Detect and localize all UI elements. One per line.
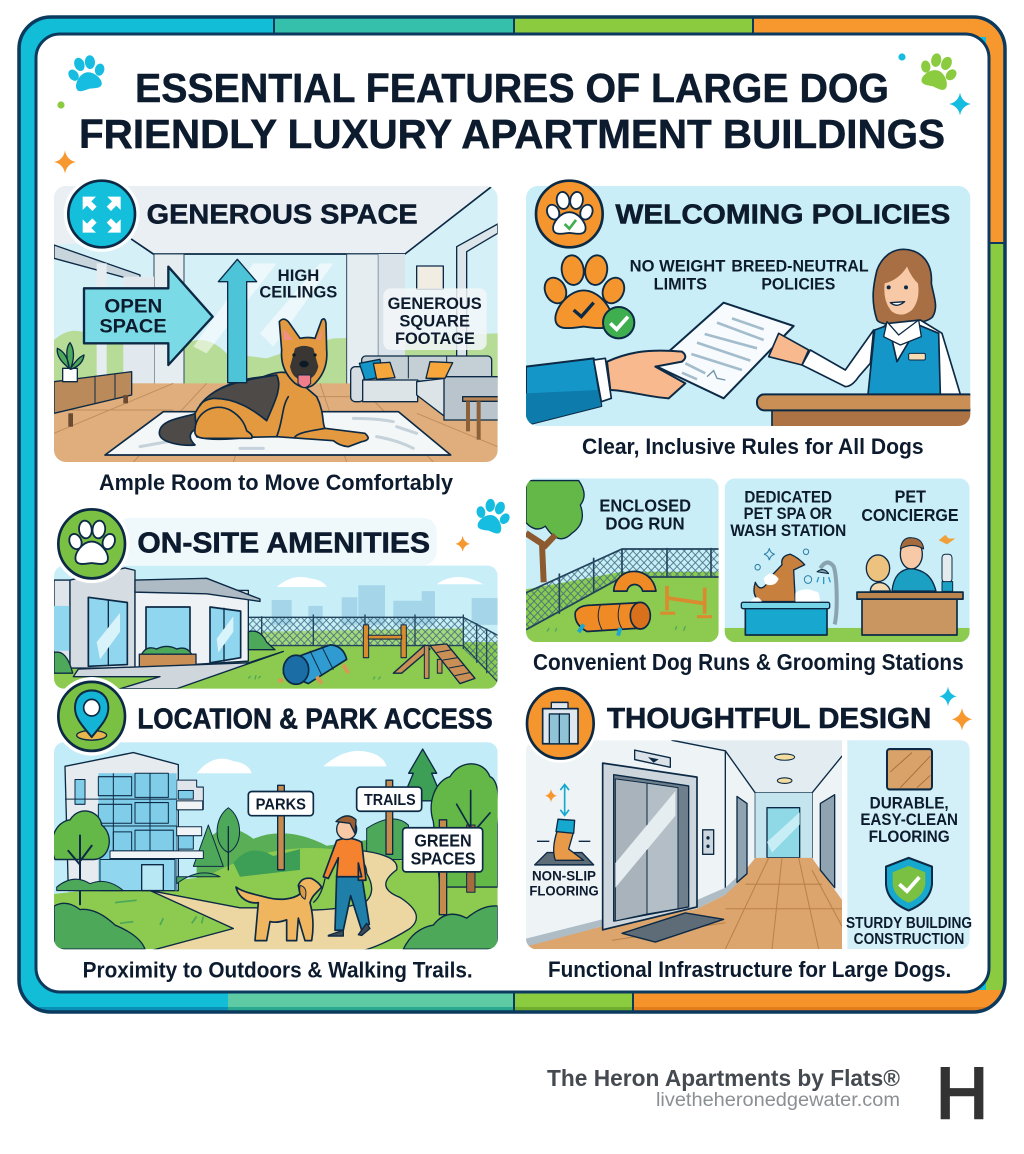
agility hurdle — [363, 625, 406, 658]
label: no weight limits: LIMITS — [654, 274, 707, 293]
label: sturdy building construction — [846, 915, 972, 948]
heading strip: on-site amenities — [117, 518, 437, 565]
agility hurdle — [660, 586, 712, 617]
caption: proximity: Proximity to Outdoors & Walking Trails. — [83, 957, 473, 983]
label: generous square footage: SQUARE — [399, 312, 470, 331]
icon: location pin — [54, 677, 130, 756]
label: dedicated pet spa: WASH STATION — [730, 522, 846, 540]
label: pet concierge: CONCIERGE — [861, 506, 959, 525]
cabinet and plant — [54, 343, 132, 427]
fence — [248, 615, 498, 682]
icon: shield check — [886, 858, 932, 911]
label: durable flooring: DURABLE, — [870, 794, 949, 813]
column: right info background — [847, 740, 970, 949]
label: dedicated pet spa — [730, 488, 846, 540]
signpost: trails: TRAILS — [364, 792, 416, 809]
panel: generous space — [54, 176, 501, 495]
decoration: paw and sparkle — [455, 495, 515, 552]
label: enclosed dog run: DOG RUN — [605, 514, 685, 534]
agility ramp — [393, 644, 475, 684]
label: durable flooring: EASY-CLEAN — [860, 811, 958, 829]
arrow: open space: OPEN — [104, 296, 162, 317]
decoration: sparkles — [939, 687, 972, 731]
signpost: parks: PARKS — [256, 796, 306, 814]
heading: on-site amenities: ON-SITE AMENITIES — [137, 527, 430, 559]
chain link fence — [526, 548, 719, 630]
elevator — [603, 750, 714, 930]
signpost: green spaces: GREEN — [414, 831, 472, 851]
dog in wash tub — [741, 548, 837, 635]
heading: generous space: GENEROUS SPACE — [147, 198, 418, 229]
decorative paws and sparkles around title — [54, 48, 971, 174]
background trees — [193, 749, 499, 892]
scene: amenities building and dog park — [54, 566, 498, 689]
hand with sleeve — [526, 351, 685, 424]
icon: paw with check — [536, 181, 603, 247]
panel: on-site amenities and location — [52, 495, 515, 983]
icon: green paw — [54, 504, 130, 583]
arrow: high ceilings — [218, 259, 337, 383]
signpost: trails — [357, 780, 422, 854]
door mat — [622, 913, 724, 942]
label: enclosed dog run — [599, 496, 691, 534]
label: generous square footage: FOOTAGE — [395, 329, 475, 348]
icon: orange paw with check — [541, 254, 634, 338]
label: no weight limits: NO WEIGHT — [630, 257, 725, 276]
footer: brand name and website: The Heron Apartments by Flats® — [547, 1065, 900, 1091]
heading: welcoming policies: WELCOMING POLICIES — [615, 198, 950, 229]
scene: pet spa and concierge — [725, 478, 970, 642]
label: durable flooring — [860, 794, 958, 846]
footer: brand name and website: livetheheronedgewater.com — [656, 1090, 900, 1111]
label: no weight limits — [630, 257, 725, 293]
icon: wood floor sample — [887, 749, 932, 789]
planter and shrubs — [54, 631, 275, 673]
label: non-slip flooring: FLOORING — [529, 883, 599, 898]
reception desk — [757, 394, 977, 428]
document — [654, 303, 794, 398]
arrow: high ceilings: CEILINGS — [259, 283, 337, 302]
label: breed-neutral policies: POLICIES — [761, 274, 835, 293]
concierge desk — [857, 535, 963, 635]
label: breed-neutral policies: BREED-NEUTRAL — [731, 257, 869, 276]
label: non-slip flooring — [529, 868, 599, 898]
caption: ample room: Ample Room to Move Comfortably — [99, 470, 454, 495]
footer: brand name and website — [547, 1065, 900, 1111]
side doors — [737, 795, 835, 888]
agility tunnel — [575, 602, 650, 636]
label: pet concierge: PET — [895, 487, 927, 507]
panel: welcoming policies — [526, 181, 977, 459]
label: sturdy building construction: STURDY BUILDING — [846, 915, 972, 932]
agility arch — [614, 571, 656, 591]
label: enclosed dog run: ENCLOSED — [599, 496, 691, 516]
icon: elevator — [523, 684, 598, 763]
scene: location and park — [52, 742, 499, 953]
arrow: open space: SPACE — [99, 317, 167, 338]
building — [54, 568, 260, 668]
icon: expand arrows — [64, 176, 140, 252]
person walking — [313, 816, 370, 936]
label: breed-neutral policies — [731, 257, 869, 293]
golden retriever — [236, 878, 322, 941]
label: dedicated pet spa: PET SPA OR — [744, 505, 832, 523]
foreground bushes — [54, 903, 498, 949]
arrow: high ceilings: HIGH — [278, 266, 319, 285]
title: ESSENTIAL FEATURES OF LARGE DOG — [135, 65, 889, 111]
signpost: green spaces — [403, 820, 483, 915]
rug — [105, 412, 451, 455]
arrow: open space — [84, 267, 213, 365]
dog: german shepherd — [159, 319, 368, 447]
label: sturdy building construction: CONSTRUCTION — [854, 931, 964, 948]
scene: hallway with elevator — [526, 740, 852, 949]
panel: dog runs, grooming and thoughtful design — [523, 478, 972, 982]
signpost: green spaces: SPACES — [411, 849, 476, 869]
signpost: parks — [248, 785, 313, 870]
label: generous square footage: GENEROUS — [388, 294, 482, 313]
logo: H: H — [936, 1054, 988, 1134]
tree left — [52, 811, 109, 904]
winding path — [143, 851, 416, 953]
icon: non-slip paw — [535, 784, 594, 865]
heading: location and park access: LOCATION & PARK ACCESS — [137, 703, 493, 735]
scene: enclosed dog run — [526, 478, 719, 642]
caption: functional infrastructure: Functional Infrastructure for Large Dogs. — [548, 957, 951, 982]
title — [79, 65, 945, 157]
heading: thoughtful design: THOUGHTFUL DESIGN — [607, 702, 931, 734]
agility tunnel — [278, 645, 348, 684]
label: non-slip flooring: NON-SLIP — [532, 868, 596, 884]
label: generous square footage — [388, 294, 482, 348]
label: pet concierge — [861, 487, 959, 525]
apartment building — [65, 753, 203, 891]
caption: convenient dog runs: Convenient Dog Runs & Grooming Stations — [533, 650, 964, 675]
sofa — [351, 356, 501, 440]
label: durable flooring: FLOORING — [869, 828, 950, 846]
title: FRIENDLY LUXURY APARTMENT BUILDINGS — [79, 111, 945, 157]
label: dedicated pet spa: DEDICATED — [744, 488, 832, 506]
caption: inclusive rules: Clear, Inclusive Rules for All Dogs — [582, 434, 924, 459]
receptionist — [769, 249, 960, 394]
